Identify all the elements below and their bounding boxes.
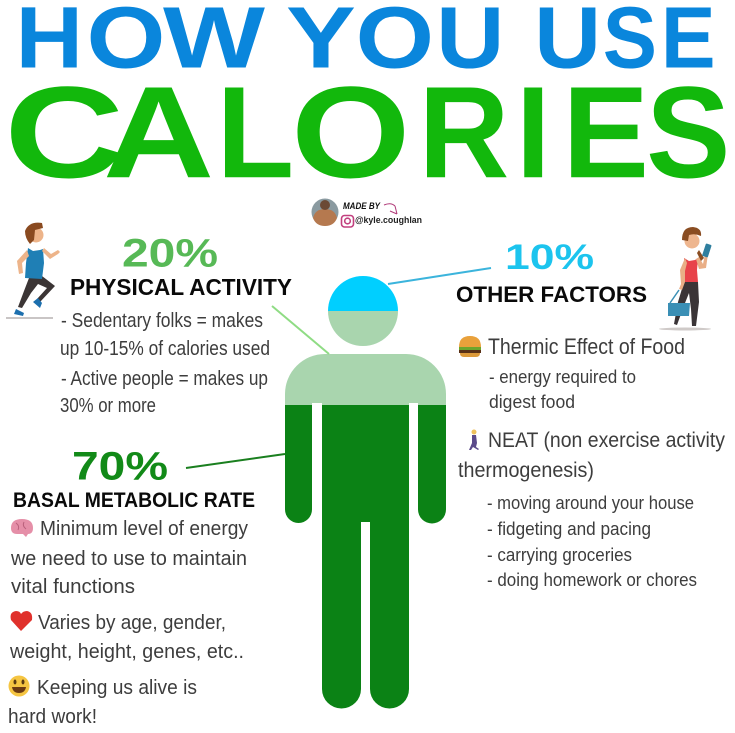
icon: smile [8,676,30,696]
title: calories: S [646,60,730,206]
panel: basal metabolic rate [8,444,255,728]
head: 10 percent [328,276,398,311]
icon: person walking [469,430,479,450]
panel: physical activity: up 10-15% of calories used [60,338,270,360]
panel: other factors: digest food [489,391,575,412]
panel: physical activity: - Active people = makes up [61,368,268,390]
title: calories: O [291,60,410,206]
panel: other factors: - moving around your house [487,492,694,513]
panel: other factors: Thermic Effect of Food [488,334,685,359]
icon: arrow [384,204,397,214]
icon: burger [459,336,481,357]
panel: basal metabolic rate: Keeping us alive is [37,677,197,699]
right arm [418,405,446,524]
panel: physical activity: - Sedentary folks = makes [61,310,263,332]
credit: made by: @kyle.coughlan [355,215,422,225]
panel: physical activity: 30% or more [60,395,156,417]
connector: light green [272,306,329,354]
panel: basal metabolic rate: vital functions [11,576,135,598]
head: lower half [328,311,398,346]
icon: runner [6,223,60,318]
title: calories [4,59,730,206]
heading: OTHER FACTORS [456,282,647,307]
connector: dark green [186,454,285,468]
title: calories: L [216,60,294,206]
panel: basal metabolic rate: we need to use to maintain [10,548,247,570]
icon: brain [11,519,33,537]
icon: instagram [342,216,354,227]
panel: other factors: - fidgeting and pacing [487,518,651,539]
heading: PHYSICAL ACTIVITY [70,274,292,300]
panel: basal metabolic rate: Varies by age, gender, [38,612,226,634]
title: calories: E [562,59,649,205]
panel: basal metabolic rate: 70% [72,444,168,488]
icon: heart [11,611,32,631]
icon: avatar [312,198,338,226]
left arm [285,405,312,523]
credit: made by [312,198,422,227]
icon: woman walking [659,227,712,330]
title: how you use [16,0,716,87]
title: calories: I [516,59,550,205]
shoulders: 20 percent [285,354,446,405]
panel: physical activity: 20% [122,231,218,275]
title: calories: A [103,60,214,206]
torso and legs: 70 percent [322,405,409,708]
panel: basal metabolic rate: weight, height, genes, etc.. [9,641,244,663]
panel: other factors: 10% [505,238,594,277]
panel: other factors: - doing homework or chores [487,569,697,590]
heading: BASAL METABOLIC RATE [13,489,255,512]
title: calories: R [419,60,509,206]
panel: basal metabolic rate: Minimum level of energy [40,518,248,540]
panel: physical activity [60,231,292,417]
panel: basal metabolic rate: hard work! [8,706,97,728]
figure: body chart [285,276,446,708]
panel: other factors: - carrying groceries [487,544,632,565]
credit: made by: MADE BY [343,201,381,211]
panel: other factors: thermogenesis) [458,459,594,482]
panel: other factors [456,238,725,590]
panel: other factors: - energy required to [489,366,636,387]
connector: blue [388,268,491,284]
title: calories: C [4,59,124,205]
